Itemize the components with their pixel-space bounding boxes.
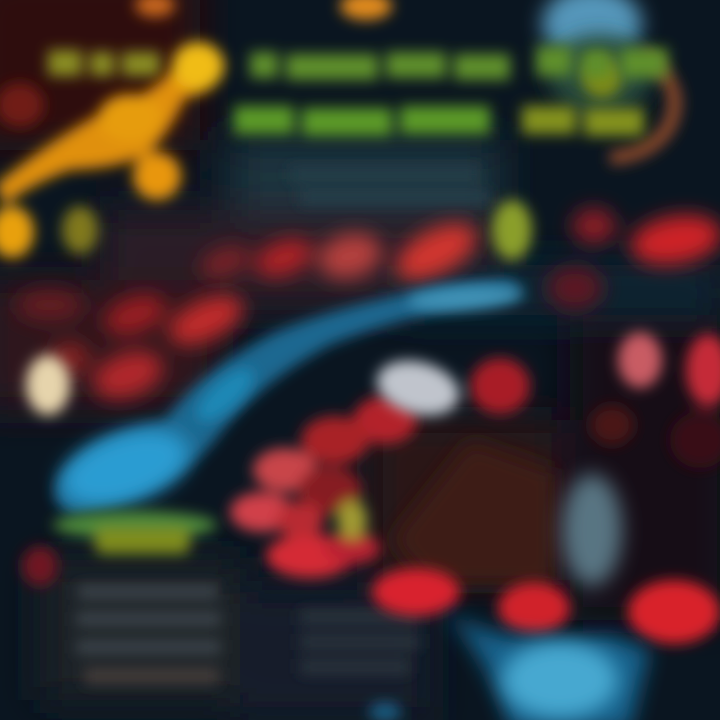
right red markers [590,332,720,468]
red bubble cluster [230,396,417,578]
subtitle text block [290,168,490,204]
drop icon with ring [542,0,675,158]
brown block [390,440,555,585]
title line one [48,50,160,76]
bottom red ovals [372,568,720,644]
title line two [234,106,490,136]
blue swoosh [52,280,525,521]
left text block [76,585,221,684]
green marker [492,200,532,260]
red data row two [16,285,251,408]
yellow arrow graphic [0,42,225,258]
cream icon [26,355,70,415]
top accent blobs [0,0,392,127]
title [48,46,668,136]
bottom blue wave [369,610,650,720]
grey panel [562,474,622,586]
white highlight with red ball [371,352,530,424]
middle text block [300,610,420,674]
red data row one [196,208,720,310]
red cap marker [22,546,58,586]
green label [53,511,217,554]
